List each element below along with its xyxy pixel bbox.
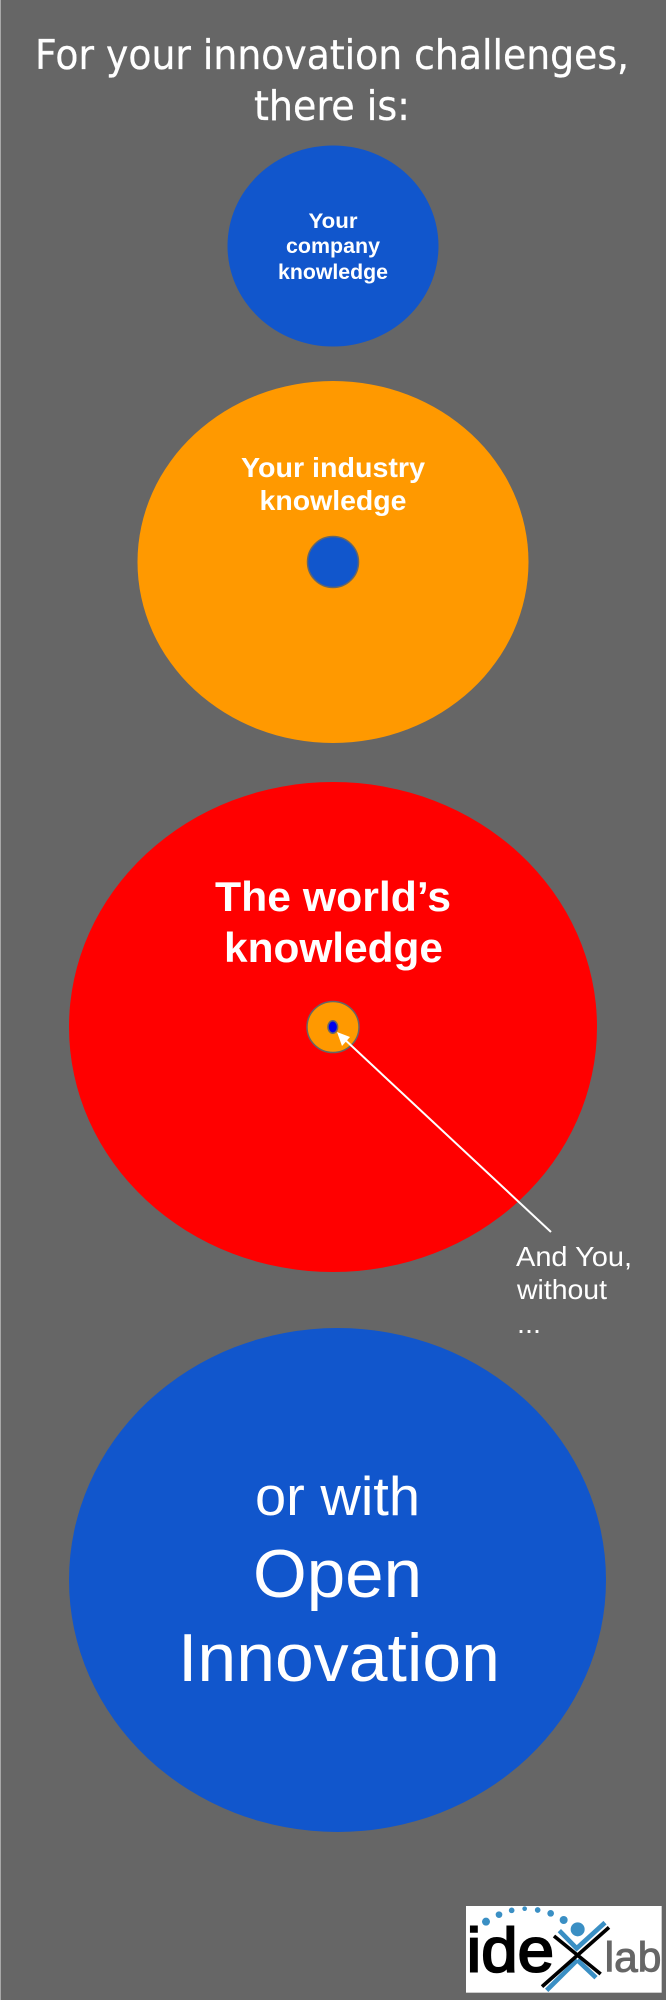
open innovation label: or with: [255, 1466, 420, 1527]
industry knowledge label: Your industry: [241, 452, 425, 483]
world knowledge label: [215, 873, 451, 971]
industry knowledge label: [241, 452, 425, 516]
title: there is:: [254, 82, 410, 130]
company knowledge label: company: [286, 235, 380, 258]
industry circle inside world: [307, 1002, 359, 1052]
company knowledge label: [278, 210, 388, 284]
panel: world knowledge circle: [69, 782, 597, 1272]
logo dots: [482, 1906, 585, 1936]
world knowledge label: The world’s: [215, 873, 451, 920]
logo wordmark ide: ide: [467, 1917, 554, 1986]
logo: idexlab: [466, 1906, 662, 1993]
title: [35, 31, 629, 130]
world knowledge label: knowledge: [224, 924, 443, 971]
open innovation label: [178, 1466, 500, 1696]
logo wordmark lab: lab: [605, 1934, 661, 1981]
callout: and you without: And You,: [516, 1241, 632, 1272]
panel: company knowledge circle: [228, 146, 438, 346]
company dot inside world: [328, 1021, 338, 1033]
open innovation label: Innovation: [178, 1620, 500, 1696]
company knowledge label: knowledge: [278, 261, 388, 284]
panel: open innovation circle: [69, 1328, 606, 1832]
callout: and you without: without: [516, 1274, 607, 1305]
title: For your innovation challenges,: [35, 31, 629, 79]
company knowledge label: Your: [308, 210, 358, 233]
panel: industry knowledge circle: [138, 381, 528, 743]
company circle inside industry: [308, 536, 358, 588]
callout: and you without: ...: [517, 1308, 541, 1339]
logo x figure: [542, 1923, 609, 1990]
industry knowledge label: knowledge: [260, 485, 406, 516]
arrow: you pointer: [337, 1032, 551, 1232]
callout: and you without: [516, 1241, 632, 1339]
open innovation label: Open: [253, 1536, 422, 1612]
